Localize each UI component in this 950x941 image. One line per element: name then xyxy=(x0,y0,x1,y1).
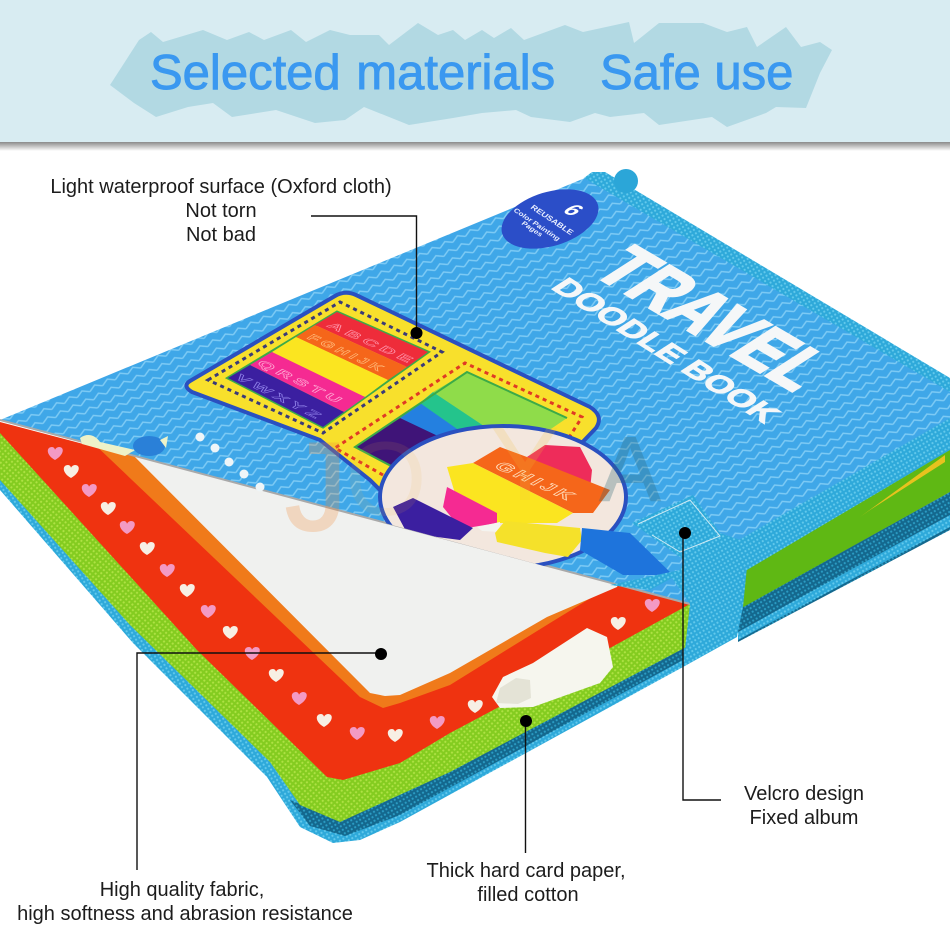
dark zipper seam xyxy=(290,645,683,836)
callout: fabric: High quality fabric, xyxy=(100,879,264,901)
marker pen xyxy=(477,521,673,575)
left dotted border xyxy=(208,302,442,433)
green fabric edge xyxy=(730,450,950,615)
yellow activity panel xyxy=(186,293,599,510)
badge: Pages xyxy=(520,219,545,238)
white drawing surface xyxy=(118,440,625,696)
velcro strap xyxy=(610,495,747,667)
callout: card paper xyxy=(426,715,626,906)
brush stroke xyxy=(110,22,832,127)
left rainbow stripes: QRSTU xyxy=(254,358,350,407)
top zipper band xyxy=(584,172,950,392)
white pen cap xyxy=(492,628,613,708)
blue zipper outer edge xyxy=(0,430,690,843)
badge: REUSABLE xyxy=(529,203,575,237)
header banner xyxy=(0,0,950,151)
watermark: O xyxy=(345,421,427,538)
orange inner border xyxy=(90,440,620,708)
badge: 6 xyxy=(557,201,590,219)
bird character xyxy=(80,435,168,456)
cover fold edge xyxy=(0,420,690,604)
left rainbow stripes: FGHIJK xyxy=(303,333,390,375)
green fabric border xyxy=(0,432,692,822)
right dotted border xyxy=(335,363,582,475)
callout: card paper: Thick hard card paper, xyxy=(426,860,626,882)
callout: waterproof surface: Light waterproof surface (Oxford cloth) xyxy=(50,176,392,198)
watermark: J xyxy=(285,418,348,557)
book: lower open page xyxy=(0,422,692,843)
magnifier circle: GHIJK xyxy=(489,460,582,504)
cover subtitle: DOODLE BOOK xyxy=(544,273,788,428)
left rainbow stripes xyxy=(228,312,428,427)
badge: Color Painting xyxy=(512,206,562,242)
watermark: A xyxy=(600,420,660,520)
callout: velcro xyxy=(679,527,864,829)
blue cover edge xyxy=(730,418,950,583)
leader line xyxy=(311,216,416,333)
callout: waterproof surface xyxy=(50,176,422,339)
dark blue spine edge xyxy=(738,492,950,642)
badge xyxy=(494,179,606,259)
title: Selected materials xyxy=(150,46,555,100)
hearts xyxy=(48,447,660,742)
callout: waterproof surface: Not torn xyxy=(185,200,257,222)
book: blue front cover xyxy=(0,169,950,604)
callout: waterproof surface: Not bad xyxy=(186,224,256,246)
callout: velcro: Velcro design xyxy=(744,783,864,805)
left rainbow stripes: ABCDE xyxy=(324,321,420,366)
watermark: Y xyxy=(490,406,560,523)
magnifier circle xyxy=(380,426,626,568)
title part two: Safe use xyxy=(600,46,793,100)
callout: card paper: filled cotton xyxy=(477,884,579,906)
right side: page edge layers xyxy=(730,418,950,642)
watermark xyxy=(285,406,660,557)
cover title: TRAVEL xyxy=(576,236,852,401)
cover dots xyxy=(196,432,264,492)
callout: fabric xyxy=(17,648,387,925)
left rainbow stripes: VWXYZ xyxy=(232,372,329,422)
red page border xyxy=(0,422,690,780)
callout: velcro: Fixed album xyxy=(750,807,858,829)
zipper pull xyxy=(614,169,638,193)
callout: fabric: high softness and abrasion resistance xyxy=(17,903,353,925)
right rainbow stripes xyxy=(355,372,567,467)
